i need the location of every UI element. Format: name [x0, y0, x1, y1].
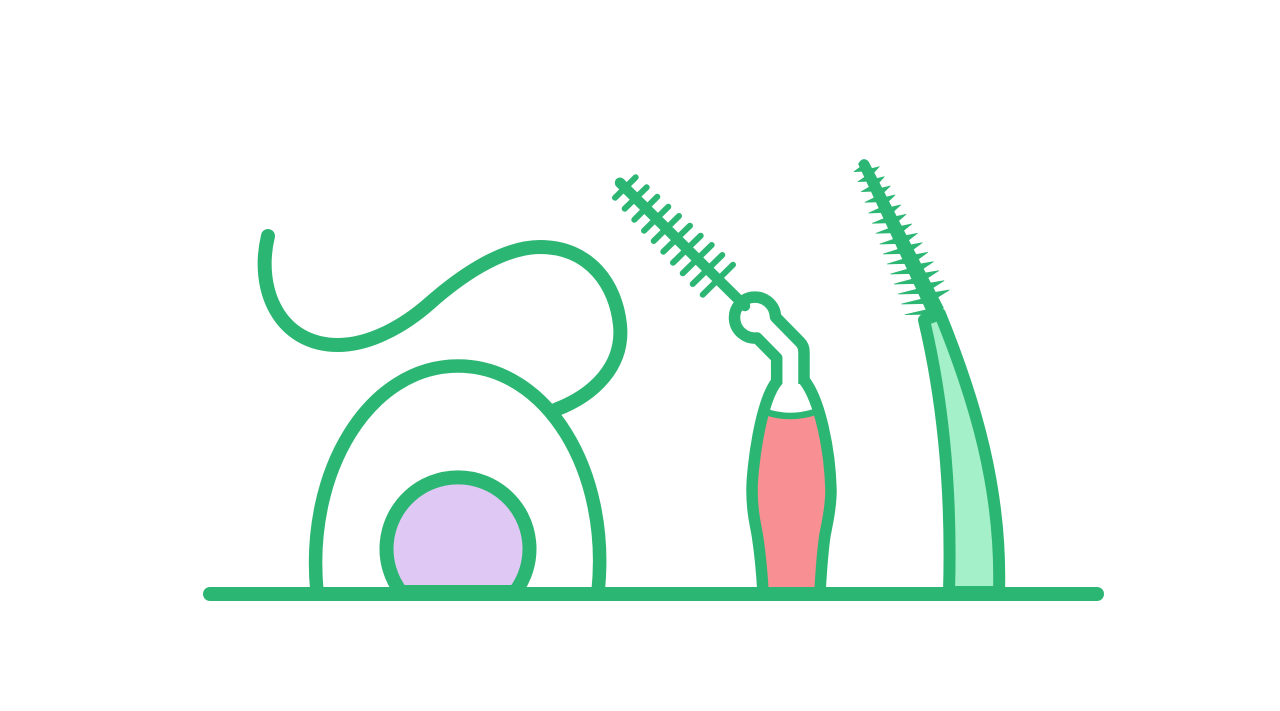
handle outline [752, 380, 831, 592]
icon: straight interdental brush [854, 160, 999, 592]
brush handle fill [752, 382, 831, 592]
floss spool [386, 477, 530, 592]
ground line [210, 587, 1097, 601]
brush bristles [615, 177, 733, 295]
icon: angled interdental brush [615, 177, 831, 592]
tapered bristles [854, 164, 949, 315]
icon: floss container [316, 366, 600, 592]
handle white top [765, 370, 816, 416]
brush spine [859, 160, 943, 315]
handle collar line [766, 412, 815, 416]
brush handle [924, 314, 999, 592]
brush neck [735, 297, 804, 384]
brush spine [620, 183, 745, 306]
floss container body [316, 366, 600, 592]
icon: floss thread [265, 236, 620, 410]
